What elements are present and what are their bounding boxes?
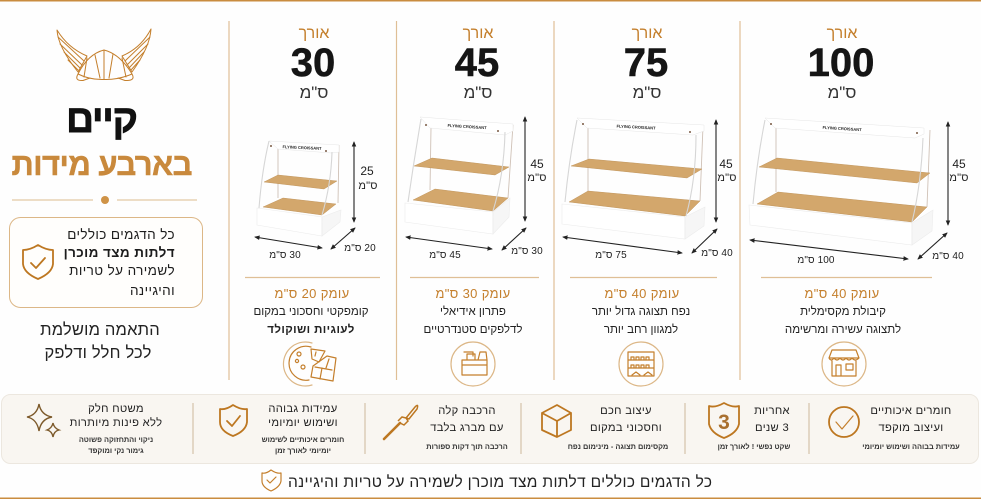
product: display 30 cm: ס"מ (358, 180, 378, 192)
heading: length 30: ס"מ (300, 83, 328, 102)
product: display 45 cm: FLYING CROISSANT (447, 123, 487, 130)
panel: brand and intro (10, 29, 202, 362)
product: display 45 cm: ס"מ (527, 172, 547, 184)
panel: features strip (2, 394, 978, 464)
heading: length 100 (808, 25, 874, 102)
heading: length 100: 100 (808, 41, 874, 85)
feature: quality materials: ועיצוב מוקפד (879, 422, 943, 434)
heading: length 45 (455, 25, 499, 102)
callout: doors included: והיגיינה (130, 283, 175, 298)
feature: easy assembly: הרכבה תוך דקות ספורות (426, 442, 508, 451)
product: display 75 cm (562, 118, 737, 261)
feature: smart design (542, 405, 668, 451)
feature: smooth surface (27, 402, 162, 455)
callout: doors included (10, 218, 202, 308)
title: קיים (66, 98, 138, 141)
product: display 75 cm: 75 ס"מ (595, 250, 627, 261)
panel: 30 cm (245, 25, 380, 386)
feature: durability: ושימוש יומיומי (268, 417, 338, 429)
divider with dot (12, 196, 197, 204)
heading: length 45: ס"מ (464, 83, 492, 102)
feature: smooth surface: משטח חלק (88, 402, 144, 415)
heading: length 100: אורך (827, 25, 857, 42)
text: depth and description (592, 286, 690, 336)
product: display 45 cm: 30 ס"מ (511, 246, 543, 257)
feature: smooth surface: ניקוי והתחזוקה פשוטה (79, 435, 153, 444)
feature: warranty: 3 (718, 411, 730, 434)
feature: warranty: 3 שנים (755, 422, 789, 434)
icon: shelves (619, 342, 663, 386)
icon: cookie and chocolate (283, 342, 336, 386)
product: display 100 cm: 45 (952, 157, 966, 171)
heading: length 30: 30 (291, 41, 335, 85)
feature: easy assembly: עם מברג בלבד (430, 421, 504, 434)
heading: length 30 (291, 25, 335, 102)
feature: easy assembly (384, 404, 508, 451)
product: display 100 cm: FLYING CROISSANT (822, 125, 862, 132)
heading: length 75: ס"מ (633, 83, 661, 102)
feature: smooth surface: גימור נקי ומוקפד (88, 446, 144, 455)
feature: smart design: וחסכוני במקום (590, 422, 662, 434)
panel: 45 cm (405, 25, 547, 386)
callout: doors included: דלתות מצד מוכרן (64, 245, 175, 260)
heading: length 45: 45 (455, 41, 499, 85)
icon: shield check (23, 245, 53, 279)
product: display 75 cm: 40 ס"מ (701, 248, 733, 259)
feature: quality materials: עמידות בבוהה ושימוש יומיומי (862, 442, 960, 451)
text: depth and description: נפח תצוגה גדול יותר (592, 305, 690, 318)
text: depth and description: עומק 40 ס"מ (804, 286, 880, 301)
feature: durability: יומיומי לאורך זמן (275, 446, 331, 455)
heading: length 30: אורך (299, 25, 329, 42)
callout: doors included: לשמירה על טריות (69, 263, 175, 278)
panel: 100 cm (749, 25, 969, 386)
product: display 30 cm: FLYING CROISSANT (282, 144, 322, 151)
heading: length 75: 75 (624, 41, 668, 85)
text: depth and description: לדלפקים סטנדרטיים (424, 323, 522, 336)
heading: length 100: ס"מ (828, 83, 856, 102)
text: depth and description (253, 286, 369, 336)
heading: length 75 (624, 25, 668, 102)
product: display 75 cm: 45 (719, 157, 733, 171)
product: display 30 cm: 20 ס"מ (344, 243, 376, 254)
feature: warranty: שקט נפשי ! לאורך זמן (718, 442, 790, 451)
product: display 100 cm: 40 ס"מ (932, 251, 964, 262)
feature: quality materials: חומרים איכותיים (870, 405, 952, 417)
text: depth and description: קיבולת מקסימלית (800, 305, 886, 318)
product: display 100 cm: ס"מ (949, 172, 969, 184)
icon: shield check (262, 470, 281, 491)
text: depth and description (424, 286, 522, 336)
text: depth and description: עומק 40 ס"מ (604, 286, 680, 301)
product: display 75 cm: FLYING CROISSANT (616, 123, 656, 131)
product: display 100 cm (749, 118, 969, 266)
heading: length 75: אורך (632, 25, 662, 42)
text: depth and description: עומק 30 ס"מ (435, 286, 511, 301)
panel: 75 cm (562, 25, 737, 386)
text: depth and description (785, 286, 901, 336)
product: display 45 cm: 45 ס"מ (429, 250, 461, 261)
feature: durability: עמידות גבוהה (268, 403, 338, 415)
feature: smooth surface: ללא פינות מיותרות (70, 416, 162, 429)
icon: counter (451, 342, 495, 386)
product: display 30 cm: 25 (360, 164, 374, 178)
text: perfect fit: לכל חלל ודלפק (44, 344, 152, 362)
product: display 100 cm: 100 ס"מ (797, 255, 835, 266)
product: display 30 cm: 30 ס"מ (269, 250, 301, 261)
heading: length 45: אורך (463, 25, 493, 42)
feature: durability (220, 403, 344, 455)
product: display 45 cm: 45 (530, 157, 544, 171)
feature: smart design: עיצוב חכם (600, 405, 652, 417)
feature: warranty (709, 403, 790, 451)
text: depth and description: פתרון אידיאלי (440, 305, 506, 318)
text: depth and description: למגוון רחב יותר (604, 323, 678, 336)
feature: smart design: מקסימום תצוגה - מינימום נפח (568, 442, 668, 451)
text: depth and description: לתצוגה עשירה ומרשימה (785, 323, 901, 336)
icon: winged croissant logo (57, 29, 151, 81)
callout: doors included: כל הדגמים כוללים (67, 227, 175, 242)
subtitle: בארבע מידות (12, 147, 192, 182)
text: depth and description: עומק 20 ס"מ (274, 286, 350, 301)
icon: shop (822, 342, 866, 386)
text: depth and description: לעוגיות ושוקולד (267, 323, 355, 336)
text: perfect fit: התאמה מושלמת (40, 321, 160, 339)
footer note: כל הדגמים כוללים דלתות מצד מוכרן לשמירה על טריות והיגיינה (288, 474, 712, 491)
feature: warranty: אחריות (754, 405, 790, 417)
feature: quality materials (829, 405, 960, 451)
product: display 30 cm (255, 141, 378, 261)
feature: easy assembly: הרכבה קלה (438, 404, 496, 417)
text: perfect fit (40, 321, 160, 362)
product: display 45 cm (405, 117, 547, 261)
product: display 75 cm: ס"מ (717, 172, 737, 184)
text: depth and description: קומפקטי וחסכוני במקום (253, 306, 369, 318)
feature: durability: חומרים איכותיים לשימוש (262, 435, 344, 444)
